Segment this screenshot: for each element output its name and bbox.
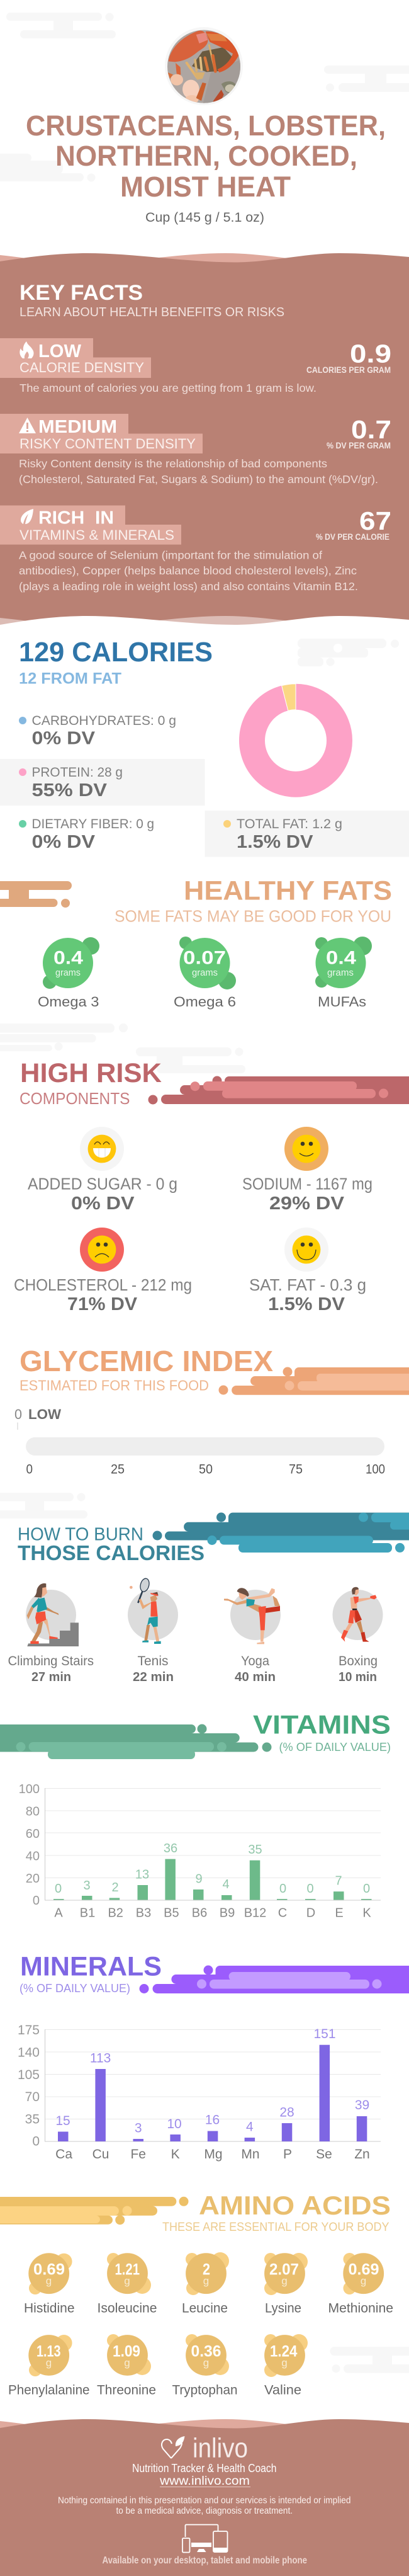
amino: lysine: g: [281, 2275, 288, 2287]
heading: healthy fats: SOME FATS MAY BE GOOD FOR YOU: [115, 908, 391, 926]
disclaimer: [58, 2495, 351, 2516]
item: cholesterol: [14, 1228, 192, 1314]
amino: valine: [264, 2334, 308, 2397]
glycemic scale: 25: [111, 1462, 125, 1476]
bar chart: vitamins: E: [335, 1906, 344, 1920]
fact: medium risky content density: RISKY CONTENT DENSITY: [20, 436, 196, 452]
mufas badge: grams: [327, 967, 354, 978]
bar chart: minerals: 16: [205, 2112, 220, 2127]
fact: medium risky content density: 0.7: [351, 415, 391, 444]
glycemic scale: LOW: [28, 1406, 61, 1422]
heading: calories: 12 FROM FAT: [19, 670, 121, 688]
logo: inlivo: [162, 2432, 248, 2464]
amino: phenylalanine: [8, 2335, 89, 2397]
title: NORTHERN, COOKED,: [55, 140, 357, 172]
bar chart: vitamins: 100: [19, 1782, 40, 1796]
bar chart: minerals: P: [283, 2147, 292, 2162]
omega 6 badge: 0.07: [183, 947, 226, 969]
activity: climbing stairs: Climbing Stairs: [8, 1654, 94, 1668]
panel: high risk components: [0, 1023, 409, 1314]
amino: tryptophan: [172, 2334, 238, 2397]
bar chart: minerals: 140: [18, 2046, 40, 2060]
title: CRUSTACEANS, LOBSTER,: [26, 110, 386, 142]
item: sodium: 29% DV: [269, 1194, 345, 1214]
fact: rich in vitamins and minerals: RICH IN: [38, 508, 114, 528]
bar chart: vitamins: 3: [83, 1879, 91, 1893]
bar chart: vitamins: K: [362, 1906, 371, 1920]
bar chart: vitamins: 4: [222, 1878, 230, 1891]
heading: amino acids: AMINO ACIDS: [199, 2191, 391, 2220]
fact: rich in vitamins and minerals: [0, 505, 391, 593]
amino: methionine: Methionine: [328, 2301, 393, 2315]
fact: rich in vitamins and minerals: (plays a leading role in weight loss) and also contains Vitamin B12.: [19, 580, 358, 593]
item: saturated fat: 1.5% DV: [268, 1294, 345, 1314]
bar chart: minerals: Zn: [354, 2147, 370, 2162]
heading: vitamins: VITAMINS: [253, 1709, 391, 1740]
bar chart: vitamins: 13: [135, 1868, 149, 1882]
fact: rich in vitamins and minerals: A good source of Selenium (important for the stimulation of: [19, 549, 322, 562]
fact: low calorie density: [0, 338, 391, 394]
amino: isoleucine: Isoleucine: [97, 2301, 157, 2315]
activity: boxing: Boxing: [339, 1654, 378, 1668]
decoration: minerals bars: [140, 1965, 409, 1993]
panel: how to burn those calories: [0, 1493, 409, 1684]
fact: low calorie density: LOW: [38, 341, 82, 362]
panel: key facts: [0, 253, 409, 630]
amino: lysine: Lysine: [265, 2301, 301, 2315]
item: sodium: SODIUM - 1167 mg: [242, 1175, 373, 1193]
amino: threonine: Threonine: [97, 2383, 156, 2397]
amino: tryptophan: Tryptophan: [172, 2383, 238, 2397]
bar chart: vitamins: 35: [248, 1843, 262, 1857]
title: [26, 110, 386, 203]
bar chart: vitamins: 60: [26, 1827, 40, 1841]
item: saturated fat: SAT. FAT - 0.3 g: [249, 1277, 366, 1294]
bar chart: vitamins: 0: [363, 1882, 370, 1896]
glycemic scale: 100: [366, 1462, 385, 1476]
disclaimer: Nothing contained in this presentation and our services is intended or implied: [58, 2495, 351, 2505]
bar chart: vitamins: 7: [335, 1874, 342, 1888]
heading: key facts: KEY FACTS: [20, 281, 143, 305]
amino: valine: Valine: [264, 2383, 301, 2397]
heading: amino acids: THESE ARE ESSENTIAL FOR YOUR BODY: [162, 2220, 389, 2234]
website link: www.inlivo.com: [159, 2475, 250, 2488]
bar chart: vitamins: 20: [26, 1872, 40, 1886]
bar chart: minerals: 4: [246, 2119, 254, 2134]
activity: climbing stairs: 27 min: [31, 1670, 71, 1684]
fact: medium risky content density: [0, 414, 391, 486]
amino: methionine: 0.69: [349, 2261, 379, 2279]
fact: rich in vitamins and minerals: VITAMINS & MINERALS: [20, 527, 174, 543]
heading: minerals: (% OF DAILY VALUE): [20, 1982, 130, 1995]
heading: how to burn: HOW TO BURN: [18, 1524, 143, 1544]
mufas badge: 0.4: [326, 947, 356, 969]
logo: inlivo: inlivo: [193, 2432, 248, 2464]
omega 3 badge: Omega 3: [38, 994, 99, 1010]
legend: total fat: 1.5% DV: [237, 832, 313, 852]
heading: amino acids: [162, 2191, 391, 2234]
legend: protein: 55% DV: [31, 780, 108, 801]
legend: carbohydrates: [19, 714, 176, 748]
bar chart: minerals: K: [171, 2147, 180, 2162]
fact: medium risky content density: Risky Content density is the relationship of bad components: [19, 457, 327, 470]
heading: glycemic index: [20, 1345, 273, 1393]
item: added sugar: 0% DV: [71, 1194, 135, 1214]
amino: methionine: [328, 2253, 393, 2315]
panel: vitamins: [0, 1709, 391, 1920]
item: added sugar: [28, 1127, 177, 1214]
bar chart: vitamins: 36: [164, 1842, 177, 1855]
icon: warning triangle: [19, 418, 36, 433]
activity: climbing stairs: [8, 1583, 94, 1684]
amino: valine: g: [281, 2357, 288, 2369]
decoration: high risk bars: [148, 1076, 409, 1105]
amino: threonine: 1.09: [113, 2343, 140, 2361]
heading: high risk: COMPONENTS: [20, 1090, 130, 1108]
heading: how to burn: [18, 1524, 204, 1564]
heading: how to burn: THOSE CALORIES: [18, 1541, 204, 1564]
legend: dietary fiber: 0% DV: [31, 832, 96, 852]
bar chart: vitamins: C: [278, 1906, 287, 1920]
amino: isoleucine: [97, 2253, 157, 2315]
panel: healthy fats: [0, 875, 392, 1010]
heading: key facts: LEARN ABOUT HEALTH BENEFITS OR RISKS: [20, 305, 284, 319]
bar chart: vitamins: B3: [136, 1906, 151, 1920]
bar chart: minerals: 10: [167, 2117, 182, 2131]
decoration: burn bars: [152, 1513, 409, 1553]
bar chart: minerals: 113: [90, 2051, 111, 2065]
bar chart: minerals: Se: [316, 2147, 332, 2162]
item: cholesterol: CHOLESTEROL - 212 mg: [14, 1277, 192, 1294]
tagline: Nutrition Tracker & Health Coach: [132, 2462, 277, 2475]
bar chart: vitamins: 0: [306, 1882, 314, 1896]
omega 6 badge: Omega 6: [174, 994, 236, 1010]
legend: carbohydrates: CARBOHYDRATES: 0 g: [31, 714, 176, 728]
heading: vitamins: [253, 1709, 391, 1753]
amino: leucine: g: [203, 2275, 209, 2287]
activity: boxing: 10 min: [339, 1670, 377, 1684]
legend: dietary fiber: DIETARY FIBER: 0 g: [31, 817, 154, 831]
bar chart: vitamins: [19, 1782, 381, 1920]
bar chart: minerals: 175: [18, 2023, 40, 2037]
decoration: glycemic bars: [219, 1367, 409, 1395]
bar chart: minerals: Mg: [204, 2147, 223, 2162]
heading: healthy fats: HEALTHY FATS: [184, 875, 392, 906]
amino: isoleucine: 1.21: [115, 2261, 140, 2279]
bar chart: vitamins: B5: [164, 1906, 179, 1920]
decoration: healthy fats bars: [0, 881, 72, 908]
fact: rich in vitamins and minerals: antibodies), Copper (helps balance blood cholesterol levels), Zinc: [19, 564, 357, 577]
amino: histidine: [24, 2253, 74, 2315]
legend: dietary fiber: [19, 817, 154, 852]
activity: yoga: [224, 1588, 281, 1684]
bar chart: vitamins: D: [306, 1906, 315, 1920]
amino: phenylalanine: Phenylalanine: [8, 2383, 89, 2397]
legend: total fat: TOTAL FAT: 1.2 g: [237, 817, 342, 831]
activity: yoga: 40 min: [235, 1670, 276, 1684]
bar chart: minerals: 151: [313, 2027, 336, 2041]
glycemic scale: 0: [26, 1462, 33, 1476]
panel: amino acids: [0, 2191, 409, 2397]
bar chart: vitamins: B1: [80, 1906, 95, 1920]
bar chart: minerals: Cu: [92, 2147, 109, 2162]
legend: protein: [19, 765, 123, 801]
bar chart: vitamins: 9: [195, 1872, 203, 1886]
panel: minerals: [18, 1951, 409, 2162]
heading: glycemic index: ESTIMATED FOR THIS FOOD: [20, 1377, 209, 1393]
bar chart: minerals: 28: [279, 2106, 294, 2120]
food photo: crab and shrimp: [165, 27, 243, 105]
bar chart: vitamins: 2: [111, 1881, 119, 1895]
disclaimer: to be a medical advice, diagnosis or treatment.: [116, 2505, 293, 2516]
bar chart: minerals: Ca: [55, 2147, 72, 2162]
fact: low calorie density: CALORIES PER GRAM: [306, 365, 391, 375]
amino: threonine: [97, 2334, 156, 2397]
amino: tryptophan: 0.36: [191, 2343, 221, 2361]
bar chart: minerals: 0: [32, 2134, 40, 2149]
activity: yoga: Yoga: [241, 1654, 269, 1668]
icon: devices: [182, 2524, 228, 2552]
bar chart: vitamins: B6: [192, 1906, 207, 1920]
amino: histidine: Histidine: [24, 2301, 74, 2315]
panel: footer: [0, 2419, 409, 2576]
heading: vitamins: (% OF DAILY VALUE): [279, 1741, 391, 1753]
glycemic scale: 0: [14, 1406, 22, 1422]
availability note: Available on your desktop, tablet and mobile phone: [102, 2555, 307, 2566]
heading: healthy fats: [115, 875, 392, 926]
heading: high risk: [20, 1058, 162, 1108]
amino: phenylalanine: 1.13: [36, 2343, 60, 2361]
legend: protein: PROTEIN: 28 g: [31, 765, 123, 780]
fact: medium risky content density: (Cholesterol, Saturated Fat, Sugars & Sodium) to the amount (%DV/gr).: [19, 473, 378, 486]
amino: histidine: g: [46, 2275, 52, 2287]
heading: key facts: [20, 281, 284, 319]
fact: low calorie density: 0.9: [350, 339, 391, 368]
donut chart: [252, 684, 340, 784]
panel: glycemic index: [14, 1345, 409, 1476]
bar chart: minerals: Mn: [241, 2147, 260, 2162]
fact: medium risky content density: MEDIUM: [38, 417, 117, 437]
mufas badge: [315, 937, 372, 1010]
amino: valine: 1.24: [270, 2343, 298, 2361]
panel: calories: [0, 637, 409, 857]
amino: threonine: g: [124, 2357, 130, 2369]
glycemic scale: 75: [289, 1462, 303, 1476]
bar chart: minerals: 105: [18, 2068, 40, 2082]
heading: glycemic index: GLYCEMIC INDEX: [20, 1345, 273, 1377]
activity: boxing: [332, 1587, 383, 1684]
fact: low calorie density: The amount of calories you are getting from 1 gram is low.: [20, 382, 317, 394]
item: sodium: [242, 1127, 373, 1214]
decoration: amino bars: [0, 2197, 189, 2225]
heading: minerals: MINERALS: [20, 1951, 162, 1981]
fact: medium risky content density: % DV PER GRAM: [327, 441, 391, 450]
amino: leucine: 2: [203, 2261, 210, 2279]
omega 6 badge: [174, 937, 236, 1010]
omega 6 badge: grams: [192, 967, 218, 978]
fact: rich in vitamins and minerals: % DV PER CALORIE: [316, 532, 389, 542]
bar chart: vitamins: B9: [220, 1906, 235, 1920]
amino: histidine: 0.69: [33, 2261, 65, 2279]
fact: rich in vitamins and minerals: 67: [359, 506, 391, 535]
bar chart: minerals: 35: [25, 2112, 40, 2126]
heading: calories: [19, 637, 213, 688]
header section: [26, 27, 384, 224]
activity: tennis: 22 min: [133, 1670, 174, 1684]
icon: leaf: [21, 509, 33, 524]
legend: total fat: [223, 817, 342, 852]
bar chart: minerals: 70: [25, 2090, 40, 2104]
serving size: Cup (145 g / 5.1 oz): [145, 210, 264, 225]
bar chart: vitamins: A: [54, 1906, 63, 1920]
bar chart: minerals: 3: [135, 2121, 142, 2136]
title: MOIST HEAT: [120, 171, 291, 203]
bar chart: vitamins: 0: [279, 1882, 286, 1896]
bar chart: minerals: 39: [355, 2098, 369, 2112]
legend: carbohydrates: 0% DV: [31, 728, 96, 748]
amino: isoleucine: g: [124, 2275, 130, 2287]
bar chart: minerals: 15: [55, 2114, 70, 2128]
bar chart: vitamins: B2: [108, 1906, 123, 1920]
heading: calories: 129 CALORIES: [19, 637, 213, 668]
mufas badge: MUFAs: [318, 994, 366, 1010]
bar chart: vitamins: 0: [33, 1894, 40, 1908]
amino: leucine: [182, 2252, 229, 2315]
bar chart: vitamins: B12: [244, 1906, 266, 1920]
activity: tennis: [128, 1578, 178, 1684]
amino: phenylalanine: g: [46, 2357, 52, 2369]
fact: low calorie density: CALORIE DENSITY: [20, 360, 144, 375]
bar chart: vitamins: 80: [26, 1805, 40, 1819]
heading: minerals: [20, 1951, 162, 1995]
decoration: vitamins bars: [0, 1724, 272, 1759]
item: saturated fat: [249, 1228, 366, 1314]
bar chart: vitamins: 40: [26, 1849, 40, 1863]
amino: methionine: g: [361, 2275, 366, 2287]
item: added sugar: ADDED SUGAR - 0 g: [28, 1175, 177, 1193]
bar chart: vitamins: 0: [55, 1882, 62, 1896]
amino: lysine: [264, 2253, 308, 2315]
omega 3 badge: grams: [55, 967, 81, 978]
bar chart: minerals: [18, 2023, 381, 2162]
heading: high risk: HIGH RISK: [20, 1058, 162, 1088]
amino: leucine: Leucine: [182, 2301, 228, 2315]
amino: lysine: 2.07: [269, 2261, 299, 2279]
amino: tryptophan: g: [203, 2357, 209, 2369]
glycemic scale: [14, 1406, 385, 1476]
glycemic scale: 50: [199, 1462, 213, 1476]
omega 3 badge: 0.4: [53, 947, 83, 969]
omega 3 badge: [38, 937, 99, 1010]
bar chart: minerals: Fe: [130, 2147, 146, 2162]
activity: tennis: Tenis: [137, 1654, 169, 1668]
icon: flame: [20, 341, 34, 358]
item: cholesterol: 71% DV: [67, 1294, 138, 1314]
